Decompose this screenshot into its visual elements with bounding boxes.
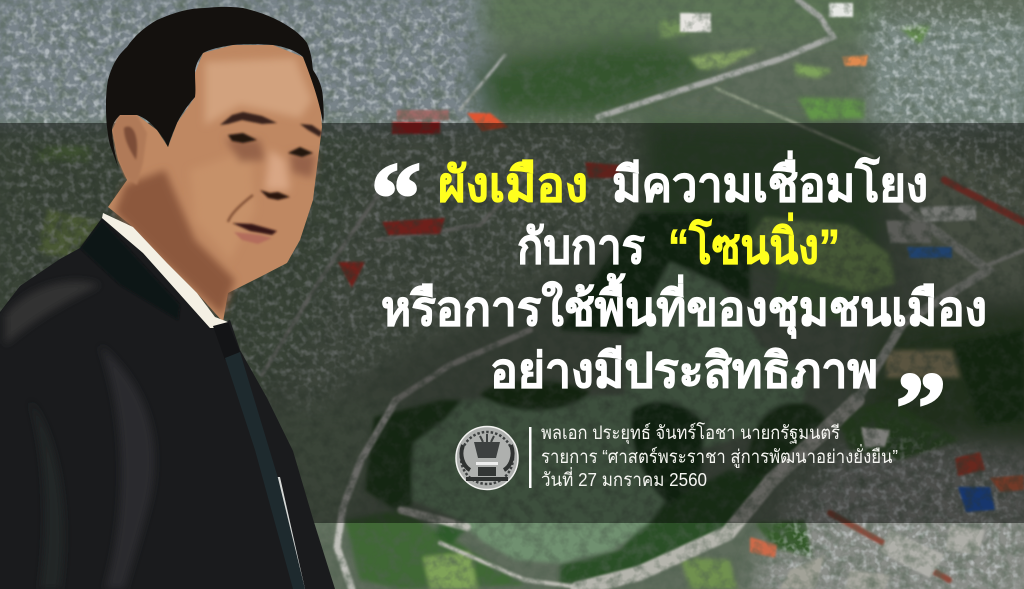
vertical divider (529, 427, 532, 488)
line 4: อย่างมีประสิทธิภาพ (490, 345, 878, 398)
line 2 (517, 212, 840, 274)
facial features (220, 112, 322, 244)
suit (0, 218, 335, 589)
government seal icon (456, 426, 518, 490)
ear (112, 115, 147, 185)
line 3: หรือการใช้พื้นที่ของชุมชนเมือง (381, 273, 987, 339)
neck and face (108, 45, 322, 322)
rooftops (338, 3, 1024, 589)
attribution text (541, 422, 898, 490)
date: วันที่ 27 มกราคม 2560 (541, 467, 707, 490)
dark overlay band (0, 123, 1024, 523)
line 2: “โซนนิ่ง” (668, 212, 840, 274)
programme name: รายการ “ศาสตร์พระราชา สู่การพัฒนาอย่างยั่งยืน” (541, 444, 898, 468)
tie (213, 322, 240, 360)
quote: main statement (371, 142, 987, 463)
hair (106, 7, 324, 167)
closing quotation mark: ” (896, 352, 946, 463)
shirt collar (102, 213, 228, 328)
line 1: ผังเมือง (438, 159, 588, 212)
speaker name: พลเอก ประยุทธ์ จันทร์โอชา นายกรัฐมนตรี (541, 422, 840, 445)
line 1 (438, 150, 928, 212)
line 1: มีความเชื่อมโยง (612, 150, 928, 212)
opening quotation mark: “ (371, 142, 421, 253)
person: prime minister (0, 7, 335, 589)
roads (262, 0, 1024, 589)
line 2: กับการ (517, 221, 645, 274)
